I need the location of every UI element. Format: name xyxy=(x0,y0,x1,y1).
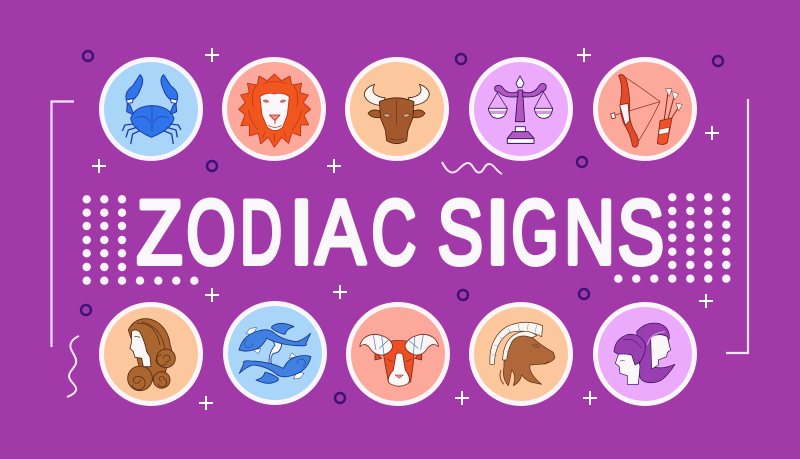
title: N xyxy=(564,182,615,284)
wavy line top xyxy=(442,162,502,174)
badge: Capricorn goat xyxy=(472,304,570,404)
badge: Cancer crab xyxy=(102,60,200,158)
dot grid right xyxy=(614,193,730,283)
title: C xyxy=(372,182,416,284)
icon: woman with long hair xyxy=(128,319,175,391)
icon: lion xyxy=(239,74,311,147)
title: A xyxy=(316,182,366,284)
badge: Pisces fish xyxy=(226,304,324,402)
icon: scales xyxy=(488,76,553,143)
decorative plus signs xyxy=(92,48,719,410)
icon: twins xyxy=(614,323,675,384)
badge: Leo lion xyxy=(224,60,324,158)
left bracket xyxy=(52,102,74,347)
title: I xyxy=(485,182,510,284)
badge: Gemini twins xyxy=(596,304,694,404)
title: D xyxy=(240,182,282,284)
icon: goat xyxy=(490,322,555,386)
wavy line left xyxy=(67,336,79,397)
badge: Virgo woman xyxy=(102,304,200,404)
icon: bow and arrows xyxy=(611,75,682,147)
badge: Sagittarius bow xyxy=(596,60,694,158)
title: G xyxy=(512,182,558,284)
right bracket xyxy=(726,99,748,353)
decorative rings xyxy=(81,51,723,403)
title: O xyxy=(186,182,236,284)
badge: Libra scales xyxy=(472,60,570,158)
icon: two fish xyxy=(239,323,311,383)
dot grid left xyxy=(82,195,198,285)
title: S xyxy=(618,182,664,284)
title: Z xyxy=(136,182,182,284)
title: I xyxy=(289,182,314,284)
title: S xyxy=(438,182,483,284)
badge: Taurus bull xyxy=(348,60,446,158)
icon: bull xyxy=(364,84,429,144)
badge: Aries ram xyxy=(348,304,448,404)
icon: crab xyxy=(122,75,181,144)
icon: ram xyxy=(360,334,438,386)
